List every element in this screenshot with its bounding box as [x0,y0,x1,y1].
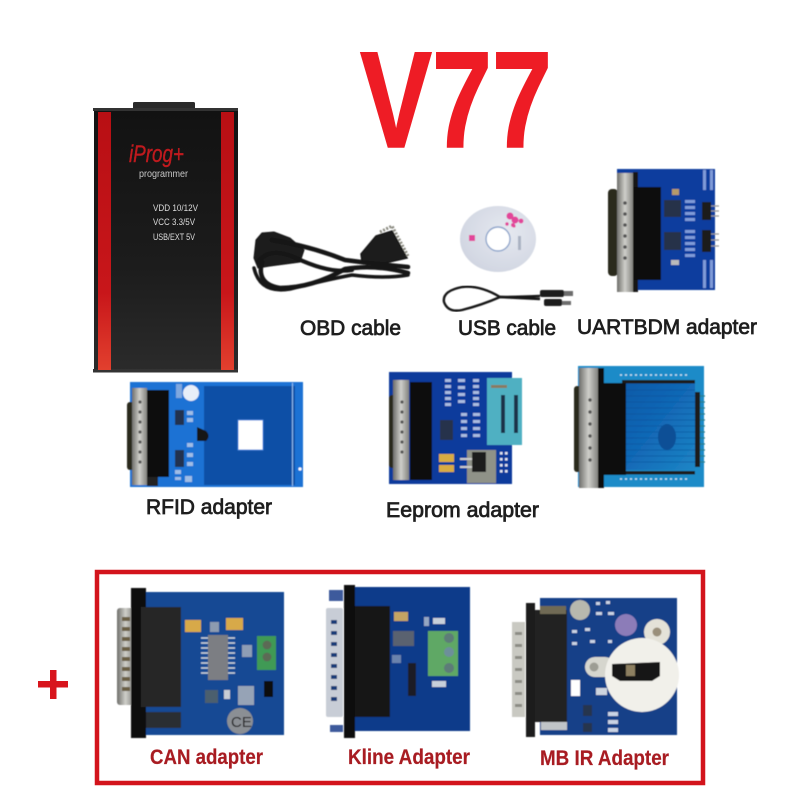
label: Eeprom adapter: Eeprom adapter [386,499,539,522]
label: OBD cable: OBD cable [300,317,401,340]
device voltage labels: VCC 3.3/5V [153,217,195,227]
device voltage labels [153,203,198,242]
Eeprom adapter board [389,372,522,484]
CAN adapter board [117,588,284,738]
RFID adapter board [127,382,303,487]
USB cable image [444,287,573,311]
CAN adapter label: CAN adapter [150,746,263,769]
MB IR adapter board [512,598,679,737]
device voltage labels: VDD 10/12V [153,203,198,213]
device right red strip [221,112,234,370]
label: USB cable: USB cable [458,317,556,340]
title: V77: V77 [360,24,552,177]
MB IR adapter label: MB IR Adapter [540,747,669,770]
device subtitle: programmer [139,168,188,180]
red frame around optional adapters [97,572,703,783]
OBD cable image [254,226,408,290]
device brand text: iProg+ [129,141,184,168]
CE mark: CE [231,714,252,731]
third blue adapter board [574,366,705,488]
iProg+ programmer device [93,102,238,372]
device voltage labels: USB/EXT 5V [153,232,195,242]
label: UARTBDM adapter: UARTBDM adapter [577,316,757,339]
Kline adapter board [326,585,470,738]
software CD [460,206,536,272]
plus sign [38,670,68,699]
UARTBDM adapter board [608,169,719,292]
label: RFID adapter: RFID adapter [146,496,272,519]
Kline adapter label: Kline Adapter [348,746,470,769]
device left red strip [98,112,111,370]
